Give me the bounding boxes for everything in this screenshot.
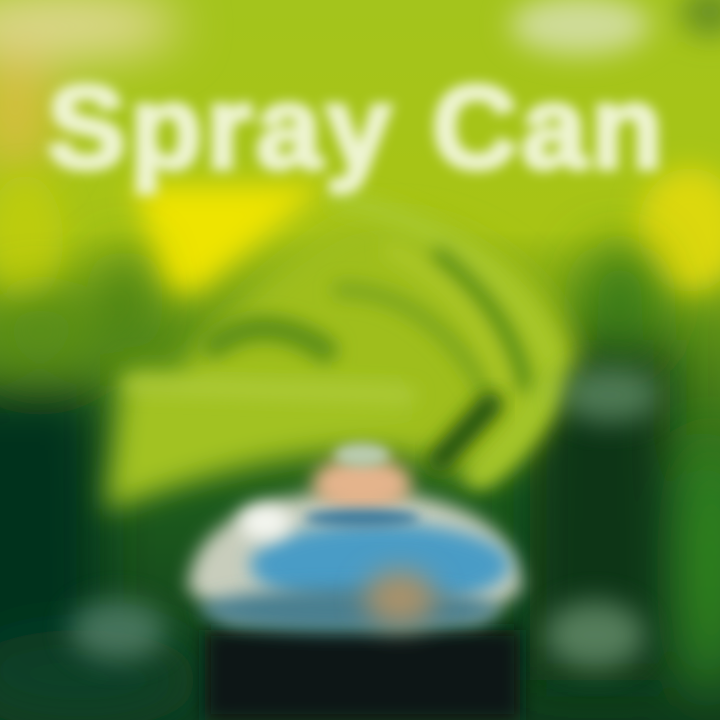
title: Spray Can — [47, 62, 667, 194]
small blurred label: upper right — [560, 367, 660, 423]
top band — [170, 43, 470, 57]
can lower band — [200, 588, 500, 632]
leaf ribs — [130, 200, 550, 475]
background glow: top left warm light — [0, 0, 180, 175]
highlight — [239, 504, 291, 540]
small blurred label: lower right — [545, 601, 645, 669]
can shoulder rim — [188, 490, 522, 620]
can body — [205, 630, 520, 720]
yellow light: right — [638, 168, 720, 292]
nozzle base — [304, 509, 420, 527]
leaf body — [105, 216, 580, 510]
can top blue — [250, 523, 510, 607]
nozzle — [312, 456, 412, 512]
can label tan — [364, 570, 436, 626]
central leaf — [105, 200, 580, 510]
nozzle top — [334, 443, 390, 467]
yellow light: centre left — [0, 175, 325, 305]
dark foliage: left — [0, 250, 200, 720]
spray can — [188, 443, 522, 720]
small blurred label: lower left — [70, 600, 166, 660]
background glow: top right pale leaves — [510, 0, 720, 55]
dark leaf gap — [440, 405, 490, 460]
dark foliage: right — [530, 245, 720, 700]
